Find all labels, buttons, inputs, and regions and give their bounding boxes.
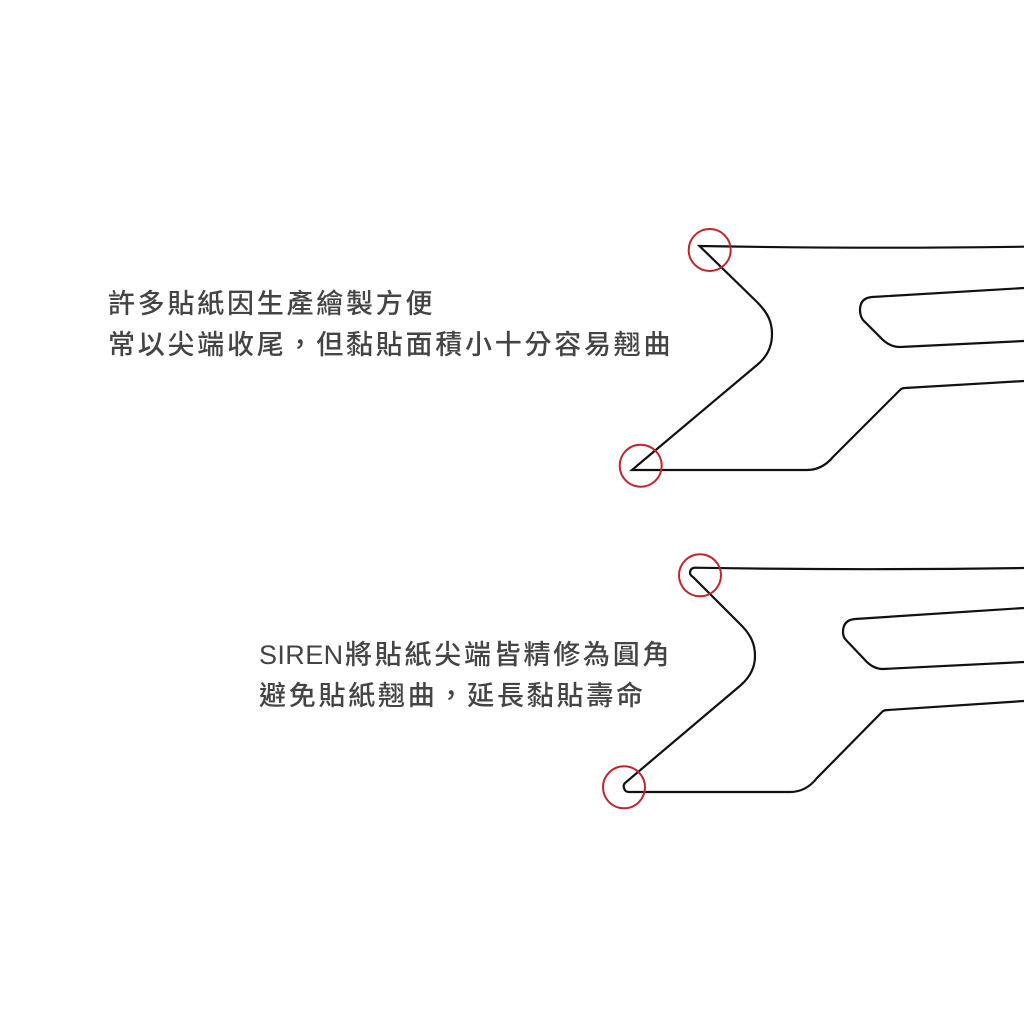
text block: sharp corner explanation: 常以尖端收尾，但黏貼面積小十分容易翹曲 [108, 330, 673, 360]
text block: sharp corner explanation [108, 289, 673, 360]
text block: sharp corner explanation: 許多貼紙因生產繪製方便 [108, 289, 435, 319]
rounded-corner sticker outline [624, 568, 1024, 792]
red circle: top sharp corner [689, 229, 731, 271]
red circle: top rounded corner [679, 554, 721, 596]
text block: SIREN rounded corner explanation [259, 640, 672, 711]
text block: SIREN rounded corner explanation: 避免貼紙翹曲，延長黏貼壽命 [259, 681, 646, 711]
sharp-corner sticker outline [632, 246, 1024, 470]
red circle: bottom rounded corner [603, 766, 645, 808]
red circle: bottom sharp corner [620, 445, 662, 487]
text block: SIREN rounded corner explanation: SIREN將貼紙尖端皆精修為圓角 [259, 640, 672, 670]
